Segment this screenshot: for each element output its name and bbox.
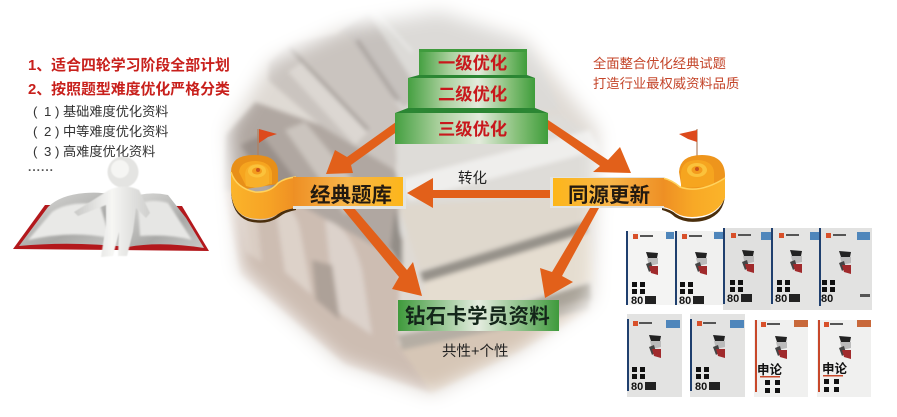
- label: commonality plus individuality: 共性+个性: [442, 343, 508, 360]
- sub-item 2: (: [33, 124, 38, 139]
- third book: [224, 101, 401, 250]
- arrow: top pyramid to update: [546, 120, 631, 173]
- cover 9: [817, 320, 871, 397]
- cover 1: 80: [631, 295, 643, 307]
- lower spines: [222, 190, 432, 394]
- callout: optimisation note: 打造行业最权威资料品质: [593, 75, 739, 91]
- sub-item 1: ): [55, 104, 59, 119]
- cover 8: [754, 320, 808, 397]
- cover 5: [819, 228, 872, 310]
- upper book cover: [340, 5, 560, 115]
- cover 2: [675, 231, 724, 307]
- upper pages: [394, 134, 409, 239]
- diamond card materials box: [398, 300, 559, 331]
- sub-item 1: 1: [44, 104, 51, 119]
- cover 7: 80: [695, 381, 707, 393]
- icon: figure on open red book: [13, 156, 209, 257]
- level 2: 二级优化: [438, 84, 507, 104]
- sub-item 1: 基础难度优化资料: [63, 104, 168, 119]
- cover 3: [723, 228, 772, 310]
- cover 4: [771, 228, 820, 310]
- sub-item 3: (: [33, 144, 38, 159]
- cover 5: 80: [821, 293, 833, 305]
- icon: right scroll with flag: [662, 129, 725, 222]
- stacked pages: [422, 238, 572, 287]
- sub-item 2: 中等难度优化资料: [63, 123, 168, 139]
- update label: 同源更新: [568, 183, 650, 207]
- arrow: classic bank to diamond materials: [342, 208, 422, 296]
- cover 9: 申论: [822, 361, 848, 376]
- arrow: update to classic bank, conversion: [407, 178, 551, 208]
- sub-item 2: ): [55, 124, 59, 139]
- arrow: update to diamond materials: [540, 208, 599, 298]
- level 1: [408, 49, 535, 78]
- level 3: 三级优化: [438, 119, 507, 139]
- right scroll and update label: [550, 129, 725, 222]
- heading list: study plan points: [28, 56, 230, 174]
- cover 4: 80: [775, 293, 787, 305]
- red point 1: 1、适合四轮学习阶段全部计划: [28, 56, 230, 74]
- bottom book: [402, 314, 577, 392]
- left scroll and classic bank label: [231, 129, 406, 223]
- sub-item 1: (: [33, 104, 38, 119]
- second book: [268, 32, 405, 170]
- cover 8: 申论: [757, 362, 783, 377]
- callout: optimisation note: 全面整合优化经典试题: [593, 55, 726, 71]
- cover 2: 80: [679, 295, 691, 307]
- callout: optimisation note: [593, 55, 739, 91]
- label: conversion: 转化: [458, 170, 487, 187]
- cover 3: 80: [727, 293, 739, 305]
- book covers: [626, 228, 872, 397]
- cover 6: 80: [631, 381, 643, 393]
- level 1: 一级优化: [438, 53, 507, 73]
- sub-item 3: ): [55, 144, 59, 159]
- background: faded stack of books: [221, 6, 605, 399]
- ellipsis: ......: [28, 160, 54, 174]
- classic bank label: [293, 177, 406, 209]
- sub-item 3: 高难度优化资料: [63, 143, 155, 159]
- sub-item 2: 2: [44, 124, 51, 139]
- icon: left scroll with flag: [231, 129, 296, 223]
- cover 6: [627, 314, 682, 397]
- level 2: [395, 78, 548, 113]
- update label: [550, 177, 664, 208]
- level 3: [395, 113, 548, 144]
- pyramid: three optimisation levels: [395, 49, 548, 144]
- arrow: top pyramid to classic bank: [326, 122, 398, 174]
- cover 1: [626, 231, 675, 307]
- diamond card materials box: 钻石卡学员资料: [405, 304, 550, 328]
- sub-item 3: 3: [44, 144, 51, 159]
- classic bank label: 经典题库: [310, 184, 392, 207]
- cover 7: [690, 314, 745, 397]
- red point 2: 2、按照题型难度优化严格分类: [28, 80, 230, 98]
